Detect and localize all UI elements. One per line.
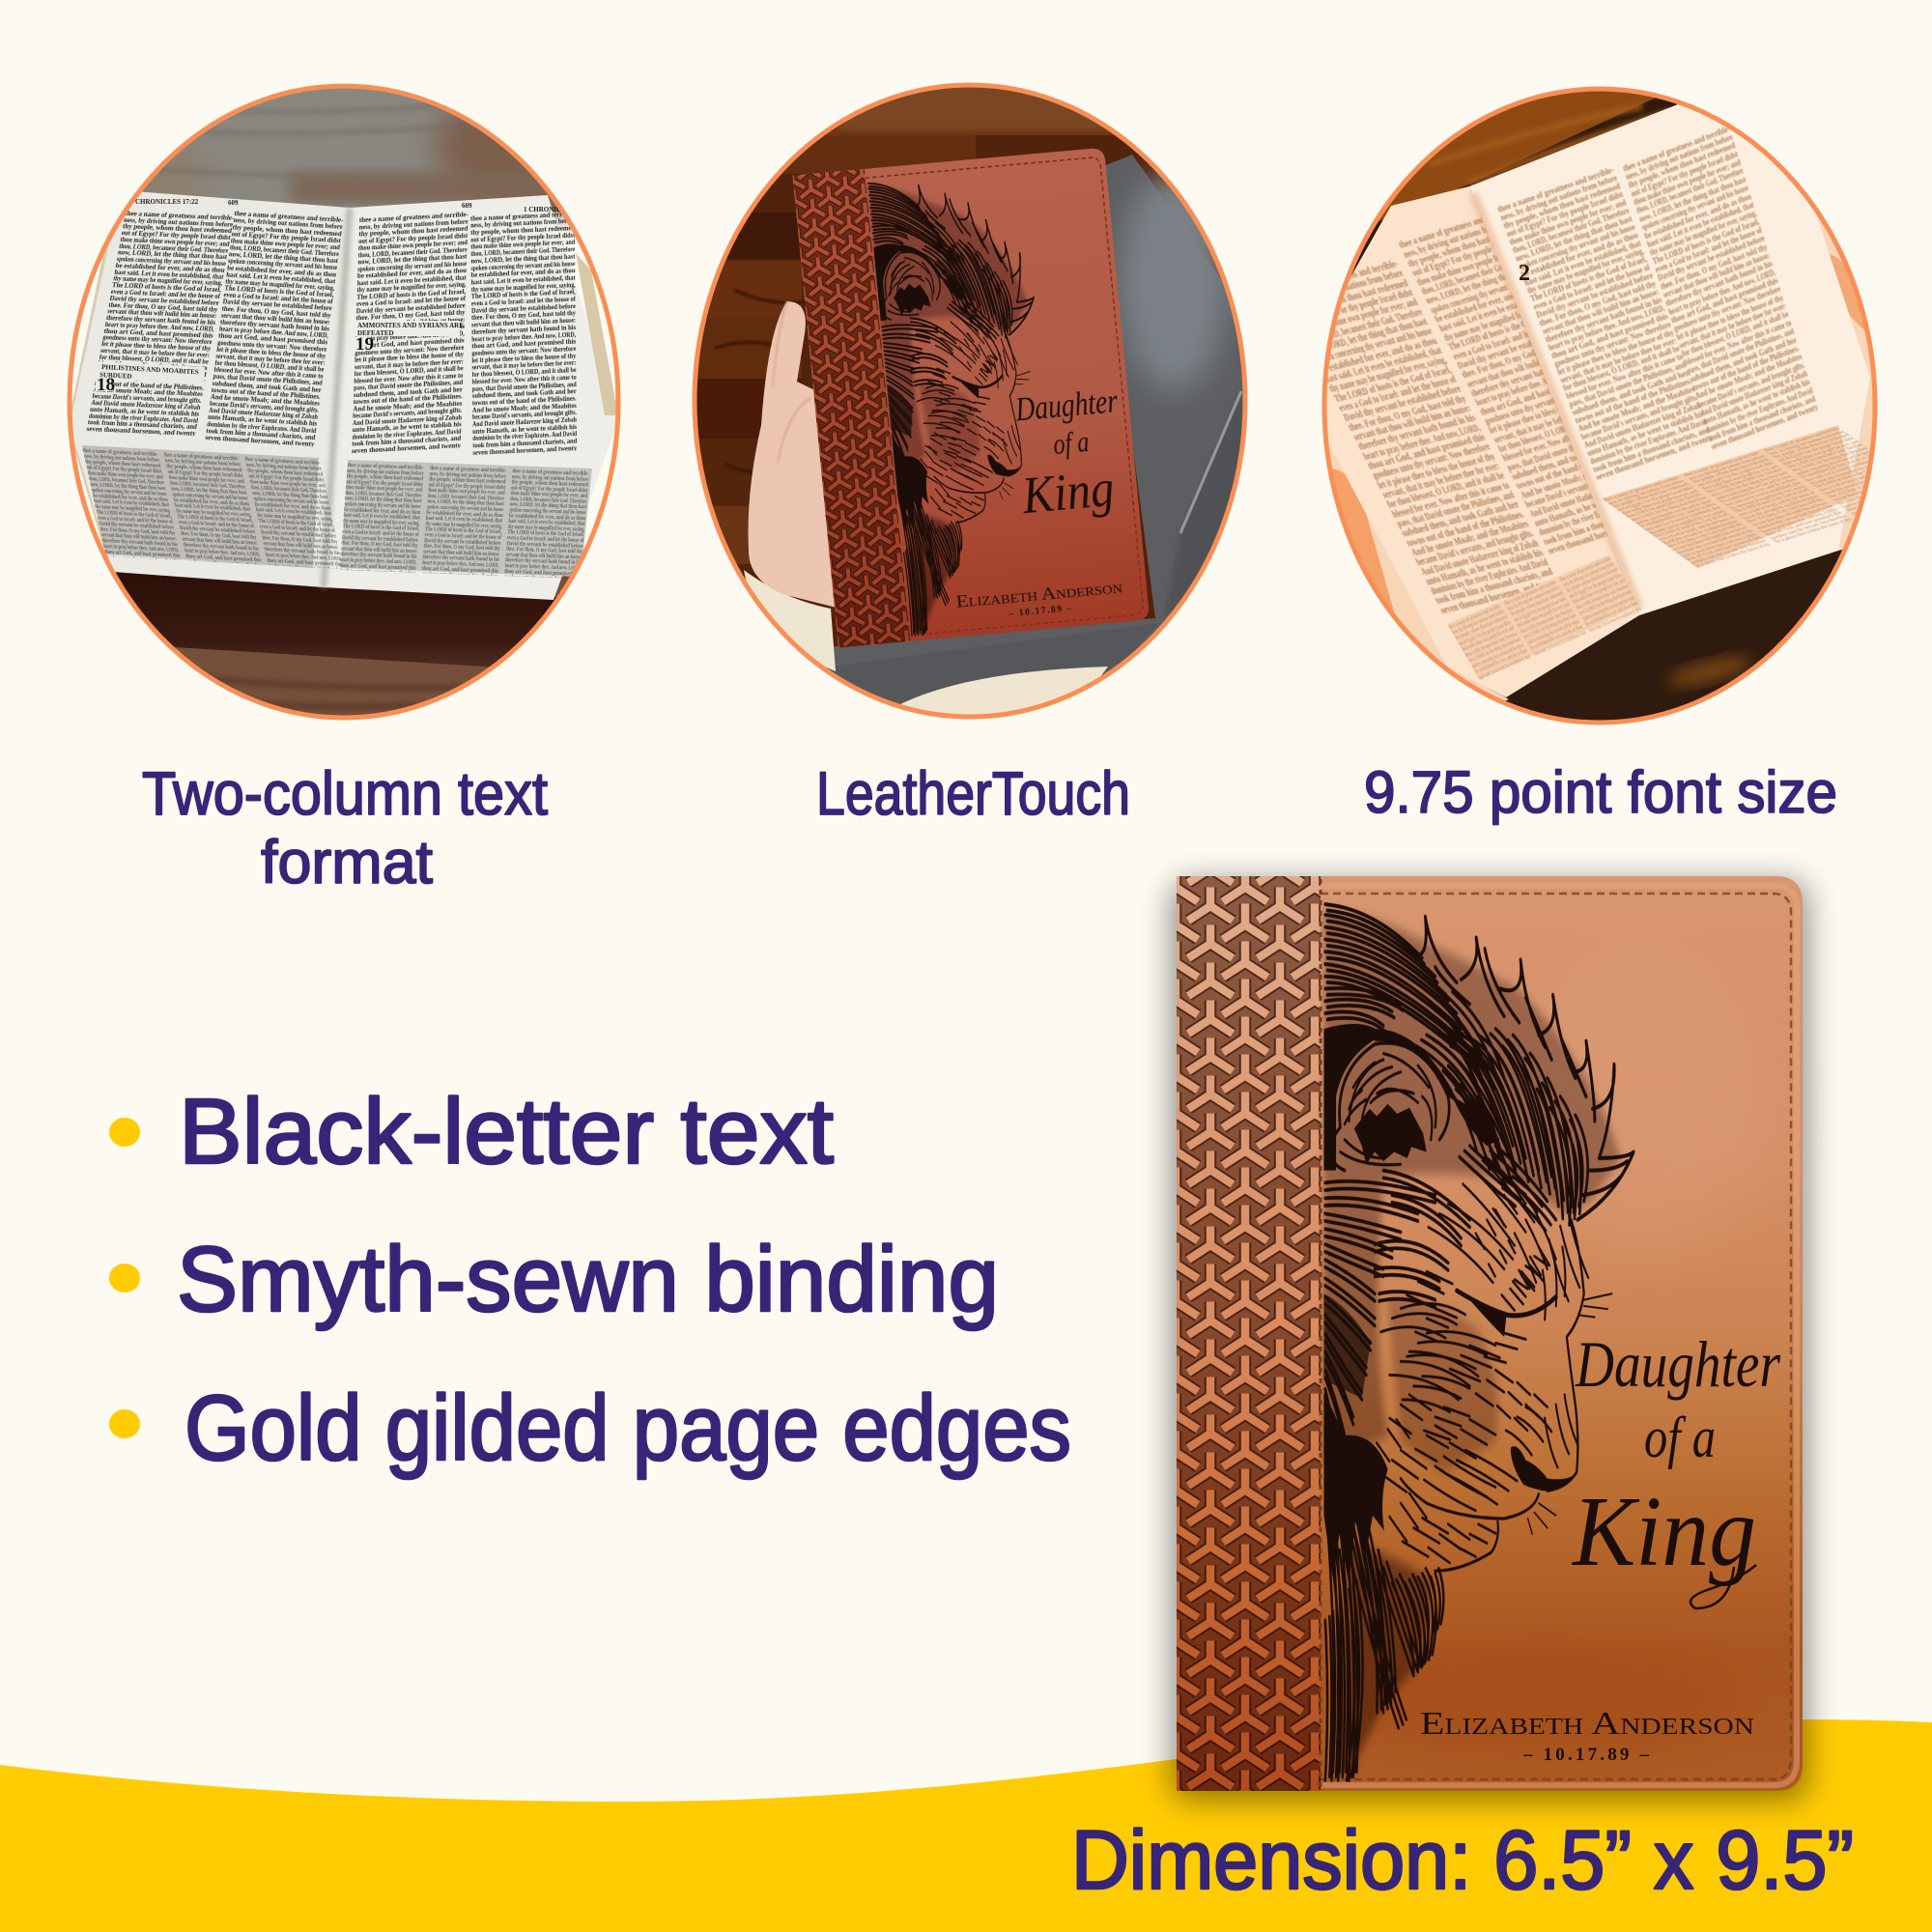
small book bbox=[793, 148, 1150, 647]
chapter numeral: 2 bbox=[1519, 261, 1530, 286]
wood background bbox=[1314, 77, 1893, 734]
engraved title: King bbox=[1019, 460, 1117, 526]
feature: smyth-sewn binding: Smyth-sewn binding bbox=[177, 1228, 999, 1331]
caption: two-column text format: format bbox=[261, 829, 433, 896]
engraved title: King bbox=[1571, 1476, 1756, 1587]
gutter shadow bbox=[324, 208, 350, 587]
engraved name: – 10.17.89 – bbox=[1522, 1745, 1650, 1765]
dimension label: Dimension: 6.5” x 9.5” bbox=[1071, 1814, 1854, 1907]
left page edge bbox=[71, 243, 110, 562]
feature: black-letter text: Black-letter text bbox=[179, 1080, 834, 1183]
heading: ammonites and syrians bbox=[355, 321, 464, 351]
photo: open bible on table, two-column text bbox=[68, 83, 620, 721]
edge binding and stitching bbox=[1321, 879, 1797, 1789]
left page text columns bbox=[1279, 206, 1662, 615]
page edge right bbox=[1768, 87, 1893, 551]
engraved name: – 10.17.89 – bbox=[1008, 603, 1072, 619]
photo: open bible in hands, 9.75 point font bbox=[1279, 77, 1932, 734]
hand bbox=[749, 301, 840, 609]
heading: ammonites and syrians: 19 bbox=[355, 334, 374, 355]
engraved name: Elizabeth Anderson bbox=[955, 578, 1123, 611]
right page text columns bbox=[352, 210, 577, 456]
caption: LeatherTouch: LeatherTouch bbox=[816, 760, 1130, 828]
engraved title bbox=[1011, 383, 1129, 526]
book cover bbox=[793, 148, 1150, 647]
right study notes bbox=[339, 460, 592, 579]
right page bbox=[1469, 93, 1870, 615]
engraved title: of a bbox=[1052, 424, 1091, 461]
running headers bbox=[135, 199, 560, 212]
heading: philistines and moabites: 18 bbox=[97, 375, 115, 395]
engraved title: of a bbox=[1644, 1406, 1716, 1469]
heading: ammonites and syrians: DEFEATED bbox=[357, 329, 394, 337]
lower left page stack bbox=[1314, 411, 1509, 734]
photo: hand holding LeatherTouch bible bbox=[686, 77, 1256, 734]
caption: font size: 9.75 point font size bbox=[1364, 759, 1837, 825]
feature list bbox=[109, 1080, 1071, 1480]
right hand bbox=[1818, 253, 1893, 348]
orange ring bbox=[695, 85, 1245, 717]
lion engraving bbox=[1324, 904, 1634, 1780]
thumb line bbox=[773, 301, 811, 464]
running headers: 1 CHRONICLES bbox=[524, 206, 574, 213]
left hand bbox=[1314, 468, 1396, 647]
engraved name bbox=[1420, 1706, 1754, 1765]
gutter shadow bbox=[1473, 193, 1639, 609]
wood floor bbox=[697, 87, 1222, 668]
bullet 3 bbox=[109, 1409, 140, 1438]
heading: philistines and moabites: PHILISTINES AND MOABITES bbox=[101, 363, 199, 376]
running headers: 609 bbox=[228, 199, 239, 207]
left page text columns bbox=[86, 210, 344, 447]
large book product shot bbox=[1171, 876, 1808, 1801]
bullet 1 bbox=[109, 1118, 140, 1147]
engraved name: Elizabeth Anderson bbox=[1420, 1706, 1754, 1742]
engraved title: Daughter bbox=[1575, 1327, 1780, 1401]
left page bbox=[1321, 186, 1639, 697]
feature: gold gilded page edges: Gold gilded page edges bbox=[185, 1377, 1071, 1480]
book spine bbox=[793, 169, 910, 647]
engraved name bbox=[955, 578, 1124, 624]
sweater bbox=[744, 570, 1108, 715]
orange ring bbox=[70, 86, 618, 718]
right page bbox=[324, 195, 618, 600]
running headers: 609 bbox=[462, 202, 472, 210]
heading: ammonites and syrians: AMMONITES AND SYRIANS ARE bbox=[357, 322, 464, 329]
left study notes bbox=[82, 445, 343, 569]
bullet 2 bbox=[109, 1264, 140, 1293]
left page bbox=[70, 190, 350, 587]
book shadow bbox=[1171, 881, 1808, 1801]
yellow wave band bbox=[0, 1719, 1932, 1932]
engraved title: Daughter bbox=[1013, 383, 1120, 429]
right study notes bbox=[1602, 425, 1932, 568]
table top wood bbox=[142, 89, 572, 236]
engraved title bbox=[1571, 1327, 1780, 1608]
stitching bbox=[866, 156, 1144, 636]
book spine bbox=[1177, 876, 1321, 1791]
caption: two-column text format: Two-column text bbox=[142, 760, 548, 828]
leather mottling bbox=[1352, 966, 1768, 1748]
running headers: CHRONICLES 17:22 bbox=[135, 198, 199, 206]
heading: philistines and moabites: SUBDUED bbox=[99, 371, 132, 381]
book cover bbox=[1177, 876, 1803, 1791]
jeans bbox=[826, 155, 1256, 710]
heading: philistines and moabites bbox=[96, 361, 205, 391]
right page text columns bbox=[1496, 124, 1819, 482]
left study notes bbox=[1447, 554, 1642, 680]
caption: two-column text format bbox=[142, 760, 548, 896]
table below book bbox=[116, 567, 570, 715]
right page edge bbox=[576, 253, 618, 415]
orange ring bbox=[1324, 89, 1875, 723]
lion engraving bbox=[867, 169, 1065, 636]
